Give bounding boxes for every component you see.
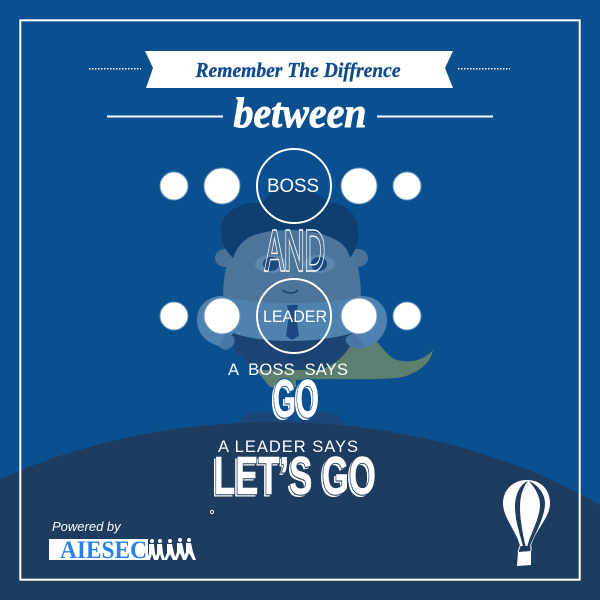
walking figures bbox=[147, 538, 196, 560]
small ring bbox=[210, 510, 214, 514]
eyes bbox=[255, 255, 287, 273]
bottom row dots bbox=[160, 298, 421, 334]
balloon icon bbox=[503, 480, 550, 566]
LET'S GO bbox=[212, 446, 376, 508]
dotted line right bbox=[458, 68, 510, 70]
top row dots bbox=[160, 168, 421, 204]
leader badge: LEADER bbox=[263, 308, 327, 326]
ribbon banner bbox=[145, 51, 453, 88]
feet bbox=[237, 412, 346, 428]
GO bbox=[271, 369, 319, 431]
ground bbox=[0, 422, 600, 600]
LET'S GO: LET’S GO bbox=[214, 446, 376, 506]
GO: GO bbox=[271, 371, 317, 431]
boss badge bbox=[257, 149, 331, 223]
rule right bbox=[377, 116, 493, 118]
GO: GO bbox=[273, 369, 319, 429]
illustration: boss character bbox=[197, 188, 433, 428]
leader badge bbox=[257, 279, 331, 353]
face bbox=[223, 227, 361, 325]
LET'S GO: LET’S GO bbox=[212, 448, 374, 508]
rule left bbox=[107, 116, 223, 118]
LET'S GO: LET’S GO bbox=[214, 446, 376, 506]
dotted line left bbox=[89, 68, 141, 70]
shirt and arms bbox=[197, 296, 387, 348]
mouth bbox=[282, 290, 298, 293]
cape bbox=[256, 338, 433, 387]
heading: between: between bbox=[234, 91, 366, 137]
cuffs bbox=[219, 333, 235, 350]
powered by: Powered by bbox=[52, 519, 122, 534]
tie bbox=[286, 305, 299, 340]
GO: GO bbox=[273, 369, 319, 429]
boss badge: BOSS bbox=[267, 176, 319, 197]
a leader says: A LEADER SAYS bbox=[218, 438, 358, 456]
hair bbox=[221, 188, 358, 258]
banner title: Remember The Diffrence bbox=[195, 58, 400, 82]
a boss says: A BOSS SAYS bbox=[228, 361, 348, 379]
torso bbox=[228, 330, 356, 370]
AIESEC logo bbox=[49, 537, 196, 564]
AIESEC logo: AIESEC bbox=[60, 537, 147, 564]
AND outlined bbox=[264, 229, 324, 272]
ears bbox=[215, 249, 235, 267]
